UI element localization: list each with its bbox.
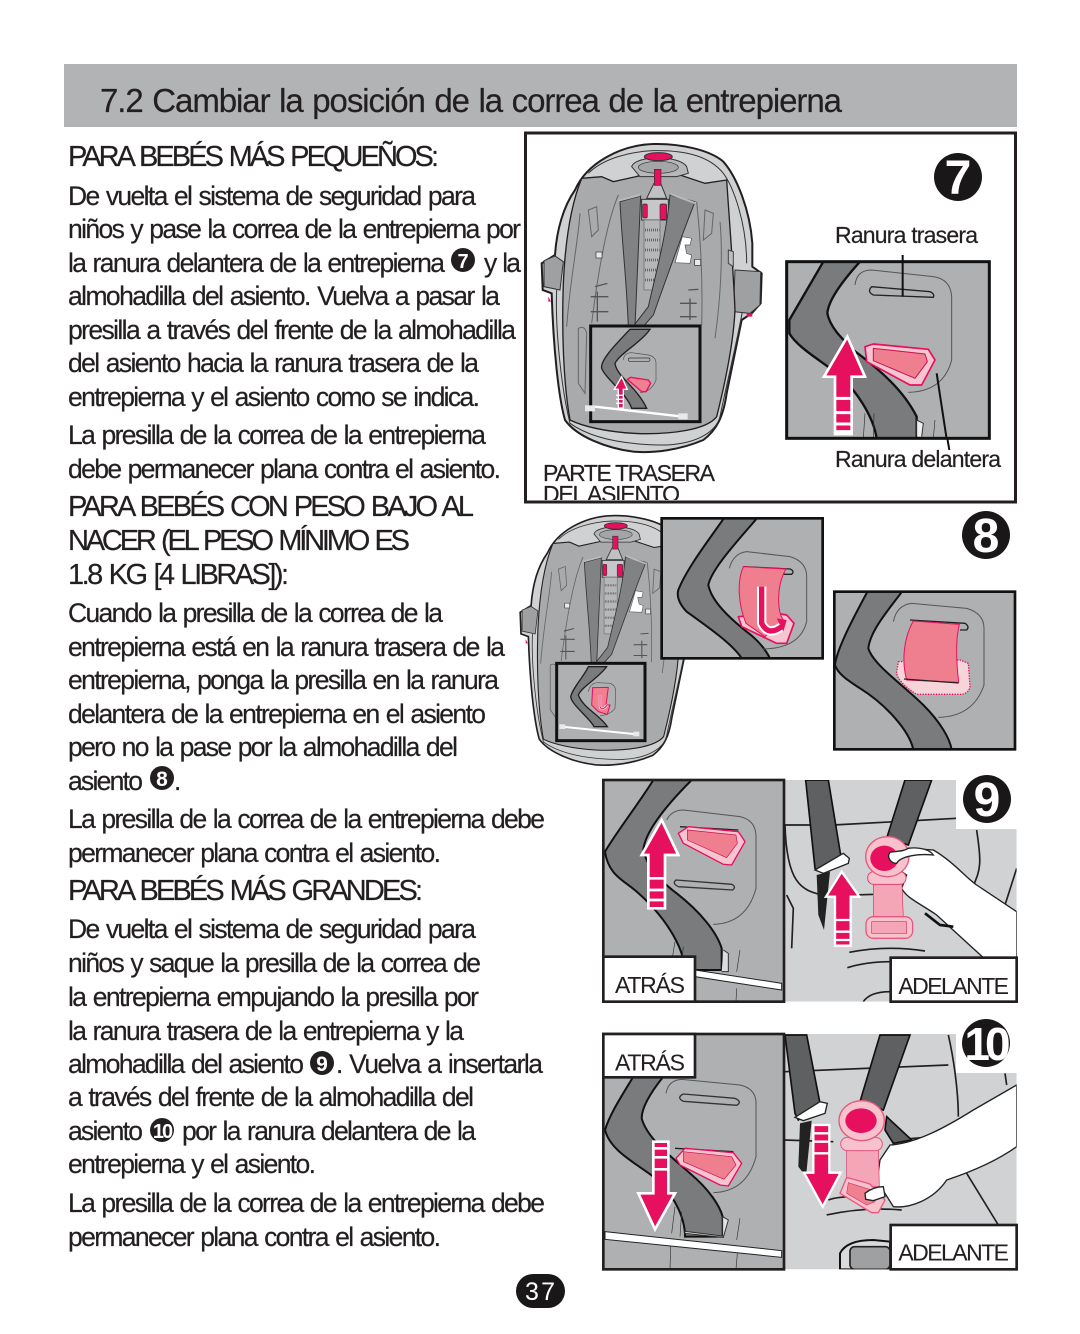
text block: instrucciones bebés grandes: la entrepierna empujando la presilla por bbox=[68, 982, 479, 1012]
text block: instrucciones bajo peso: . bbox=[174, 766, 181, 796]
panel: paso 8 bbox=[520, 510, 1015, 765]
heading: bebés con peso bajo al nacer: NACER (EL PESO MÍNIMO ES bbox=[68, 524, 410, 557]
label: adelante bbox=[891, 1225, 1017, 1269]
inset: asiento recuadro paso 8 bbox=[557, 663, 645, 741]
badge: paso 9: 9 bbox=[974, 774, 1000, 827]
heading: para bebés más pequeños: PARA BEBÉS MÁS PEQUEÑOS: bbox=[68, 139, 439, 173]
text block: instrucciones bebés grandes: asiento bbox=[68, 1116, 143, 1146]
text block: instrucciones bebés pequeños: y la bbox=[484, 248, 521, 278]
text block: instrucciones bajo peso: entrepierna, ponga la presilla en la ranura bbox=[68, 665, 499, 695]
text block: instrucciones bebés pequeños: del asiento hacia la ranura trasera de la bbox=[68, 348, 479, 378]
badge: paso 9 bbox=[956, 774, 1017, 829]
label: parte trasera del asiento bbox=[544, 464, 715, 500]
text block: instrucciones bebés grandes: a través del frente de la almohadilla del bbox=[68, 1082, 474, 1112]
illustration: base del asiento paso 8 bbox=[520, 516, 701, 765]
text block: instrucciones bebés grandes: permanecer plana contra el asiento. bbox=[68, 1222, 441, 1252]
text block: instrucciones bebés grandes: 10 bbox=[153, 1121, 173, 1143]
text block: instrucciones bebés grandes bbox=[68, 914, 545, 1252]
text block: instrucciones bajo peso: entrepierna está en la ranura trasera de la bbox=[68, 632, 505, 662]
badge: paso 7 bbox=[934, 152, 982, 205]
text block: instrucciones bajo peso: asiento bbox=[68, 766, 143, 796]
page number bbox=[516, 1274, 565, 1308]
text block: instrucciones bajo peso: delantera de la entrepierna en el asiento bbox=[68, 699, 486, 729]
label: ranura delantera: Ranura delantera bbox=[835, 446, 1001, 472]
badge: paso 7: 7 bbox=[945, 152, 971, 205]
label: ranura trasera: Ranura trasera bbox=[835, 222, 978, 248]
label: atrás bbox=[603, 1034, 695, 1077]
illustration: base del asiento paso 7 bbox=[542, 144, 762, 452]
inset: presilla doblada bbox=[662, 517, 823, 658]
inset: atrás paso 10 bbox=[603, 1034, 1017, 1269]
text block: instrucciones bebés pequeños: entrepierna y el asiento como se indica. bbox=[68, 382, 480, 412]
heading: bebés con peso bajo al nacer: 1.8 KG [4 LIBRAS]): bbox=[68, 559, 289, 591]
text block: instrucciones bebés grandes: niños y saque la presilla de la correa de bbox=[68, 948, 481, 978]
text block: instrucciones bebés pequeños: niños y pase la correa de la entrepierna por bbox=[68, 214, 521, 244]
heading: bebés con peso bajo al nacer: PARA BEBÉS CON PESO BAJO AL bbox=[68, 490, 474, 523]
page number: 37 bbox=[525, 1278, 555, 1306]
badge: paso 10 bbox=[956, 1018, 1017, 1073]
text block: instrucciones bebés pequeños: almohadilla del asiento. Vuelva a pasar la bbox=[68, 281, 500, 311]
panel: paso 7 bbox=[526, 133, 1016, 507]
text block: instrucciones bebés pequeños: presilla a través del frente de la almohadilla bbox=[68, 315, 516, 345]
text block: instrucciones bebés grandes: por la ranura delantera de la bbox=[182, 1116, 476, 1146]
label: parte trasera del asiento: DEL ASIENTO bbox=[543, 481, 680, 507]
text block: instrucciones bebés grandes: De vuelta el sistema de seguridad para bbox=[68, 914, 476, 944]
title bar: 7.2 Cambiar la posición de la correa de la entrepierna bbox=[100, 82, 843, 119]
text block: instrucciones bajo peso: permanecer plana contra el asiento. bbox=[68, 838, 441, 868]
text block: instrucciones bebés pequeños bbox=[68, 181, 521, 484]
inset: presilla plana bbox=[834, 590, 1015, 750]
label: adelante: ADELANTE bbox=[898, 973, 1009, 999]
label: atrás: ATRÁS bbox=[615, 972, 685, 998]
label: parte trasera del asiento: PARTE TRASERA bbox=[543, 460, 716, 486]
label: adelante bbox=[891, 958, 1017, 1002]
text block: instrucciones bebés grandes: entrepierna y el asiento. bbox=[68, 1149, 316, 1179]
panel: paso 9 bbox=[603, 774, 1017, 1002]
heading: bebés más grandes: PARA BEBÉS MÁS GRANDES: bbox=[68, 874, 423, 907]
text block: instrucciones bebés pequeños: debe permanecer plana contra el asiento. bbox=[68, 454, 501, 484]
badge: paso 8 bbox=[962, 510, 1010, 563]
text block: instrucciones bebés pequeños: 7 bbox=[457, 251, 469, 273]
inset: ranuras paso 7 bbox=[787, 255, 989, 450]
label: atrás bbox=[603, 957, 695, 1002]
text block: instrucciones bajo peso: Cuando la presilla de la correa de la bbox=[68, 598, 443, 628]
text block: instrucciones bajo peso: La presilla de la correa de la entrepierna debe bbox=[68, 804, 545, 834]
text block: instrucciones bebés grandes: la ranura trasera de la entrepierna y la bbox=[68, 1016, 464, 1046]
inset: atrás paso 9 bbox=[603, 780, 1017, 1002]
text block: instrucciones bebés grandes: La presilla de la correa de la entrepierna debe bbox=[68, 1188, 545, 1218]
text block: instrucciones bebés pequeños: La presilla de la correa de la entrepierna bbox=[68, 420, 486, 450]
label: adelante: ADELANTE bbox=[898, 1240, 1009, 1266]
label: atrás: ATRÁS bbox=[615, 1049, 685, 1075]
badge: paso 8: 8 bbox=[973, 510, 999, 563]
illustration: adelante paso 10 bbox=[785, 1034, 1017, 1269]
heading: bebés con peso bajo al nacer bbox=[68, 490, 474, 591]
text block: instrucciones bebés grandes: . Vuelva a insertarla bbox=[336, 1049, 543, 1079]
panel: paso 10 bbox=[603, 1018, 1017, 1269]
illustration: adelante paso 9 bbox=[785, 780, 1017, 1002]
text block: instrucciones bajo peso: pero no la pase por la almohadilla del bbox=[68, 732, 458, 762]
text block: instrucciones bajo peso bbox=[68, 598, 545, 868]
text block: instrucciones bebés pequeños: De vuelta el sistema de seguridad para bbox=[68, 181, 476, 211]
badge: paso 10: 10 bbox=[964, 1018, 1009, 1070]
text block: instrucciones bebés grandes: 9 bbox=[316, 1053, 328, 1076]
title bar bbox=[64, 64, 1017, 127]
text block: instrucciones bebés pequeños: la ranura delantera de la entrepierna bbox=[68, 248, 445, 278]
text block: instrucciones bajo peso: 8 bbox=[156, 768, 168, 791]
text block: instrucciones bebés grandes: almohadilla del asiento bbox=[68, 1049, 304, 1079]
